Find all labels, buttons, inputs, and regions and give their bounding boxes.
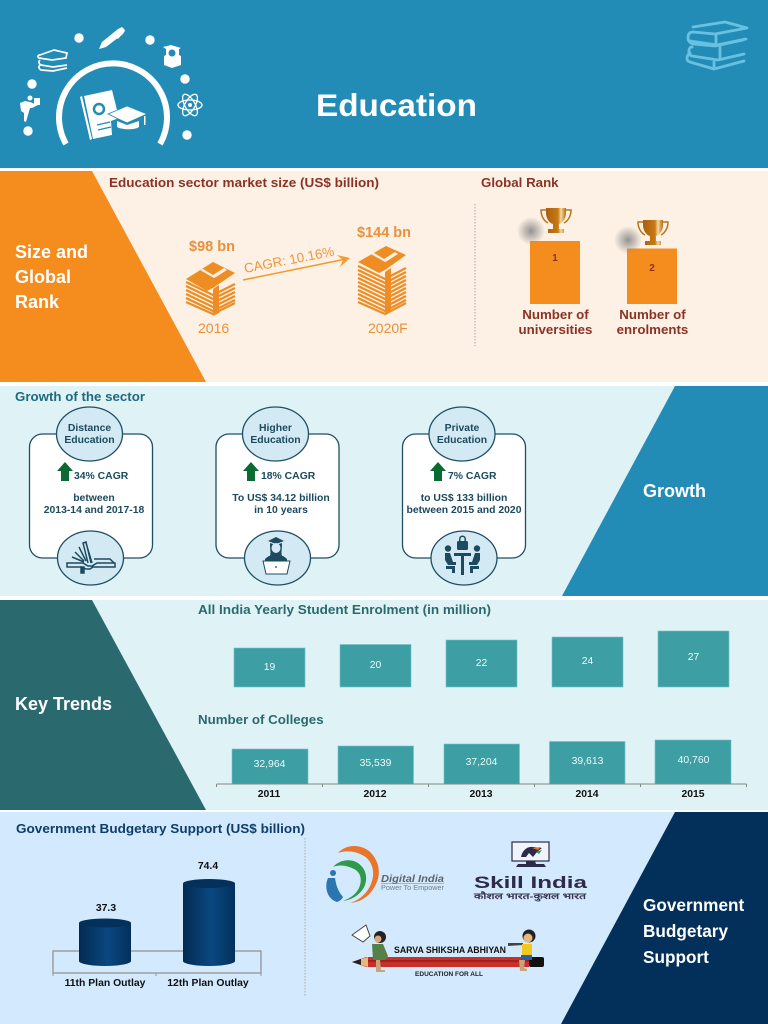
section label: key trends: Key Trends [15,694,112,714]
logo: sarva shiksha abhiyan [352,925,544,978]
CAGR label: CAGR: 10.16% [243,244,336,276]
card: private education: 7% CAGR [448,471,497,482]
chart: cylinders: 12th Plan Outlay [167,978,249,989]
card: distance education: 34% CAGR [74,471,129,482]
podium: number of universities: Number of [522,307,589,322]
icon: trophy [638,220,668,245]
bar chart: number of colleges: 37,204 [466,757,498,768]
card: higher education [216,407,339,585]
section label: government budgetary support: Support [643,947,709,967]
header icon: education emblem [20,27,202,144]
logo: skill india: कौशल भारत-कुशल भारत [473,891,588,902]
bar chart: number of colleges: 39,613 [572,756,604,767]
card: distance education: 2013-14 and 2017-18 [44,505,144,516]
bar chart: number of colleges: 2011 [258,789,280,800]
card: private education: between 2015 and 2020 [407,505,522,516]
heading: global rank: Global Rank [481,175,559,190]
chart: cylinders: 37.3 [96,903,116,914]
card: higher education: Higher [259,423,292,434]
section label: size and global rank: Global [15,267,71,287]
chart: market size growth [186,225,411,336]
panel: size and global rank [0,171,768,382]
podium: number of enrolments: enrolments [617,322,688,337]
card: private education: Education [437,435,487,446]
logo: skill india: Skill India [474,874,588,892]
logo: digital india: Digital India [381,873,444,885]
card: private education [402,407,526,585]
heading: growth of the sector: Growth of the sector [15,389,145,404]
bar chart: number of colleges: 2014 [575,789,599,800]
section label: government budgetary support [643,895,745,967]
logo: sarva shiksha abhiyan: EDUCATION FOR ALL [415,971,483,978]
boy pointing [508,930,536,971]
card: higher education: Education [250,435,301,446]
icon: up arrow [243,462,259,481]
icon: stacked books [687,22,747,69]
panel: government budgetary support [0,812,768,1024]
heading: market size: Education sector market size (US$ billion) [109,175,379,190]
bar chart: number of colleges: 2015 [681,789,705,800]
header band [0,0,768,168]
bar chart: student enrolment: 20 [370,660,381,671]
podium: number of universities: 1 [552,253,558,264]
heading: student enrolment: All India Yearly Student Enrolment (in million) [198,602,491,617]
card: higher education: 18% CAGR [261,471,316,482]
icon: up arrow [430,462,446,481]
logo: skill india [473,842,588,902]
year 2016: 2016 [198,320,229,336]
card: distance education: Distance [68,423,111,434]
bar chart: student enrolment [234,631,729,687]
section label: growth: Growth [643,481,706,501]
panel: key trends [0,600,768,810]
heading: budgetary support: Government Budgetary Support (US$ billion) [16,821,305,836]
podium: number of enrolments: 2 [649,263,655,274]
icon: open book [67,542,115,573]
section label: government budgetary support: Government [643,895,745,915]
bar chart: student enrolment: 22 [476,658,487,669]
card: distance education: between [73,493,115,504]
section label: size and global rank: Rank [15,292,60,312]
card: higher education: To US$ 34.12 billion [232,493,330,504]
card: higher education: in 10 years [254,505,308,516]
podium: number of enrolments: Number of [619,307,686,322]
icon: people with lock [445,536,480,575]
bar chart: number of colleges: 40,760 [678,755,710,766]
bar chart: number of colleges: 35,539 [360,758,392,769]
card: private education: Private [445,423,480,434]
section label: government budgetary support: Budgetary [643,921,728,941]
logo: digital india: Power To Empower [381,883,444,892]
logo: sarva shiksha abhiyan: SARVA SHIKSHA ABHIYAN [394,945,506,956]
logo: digital india [326,846,444,903]
podium: number of enrolments [614,220,688,337]
section label: size and global rank: Size and [15,242,88,262]
card: private education: to US$ 133 billion [421,493,507,504]
icon: money stack 2016 [186,262,235,316]
chart: cylinders: 74.4 [198,861,218,872]
title: Education [316,87,477,123]
chart: cylinders: 11th Plan Outlay [65,978,146,989]
girl with book [352,925,388,972]
bar chart: student enrolment: 19 [264,662,275,673]
chart: cylinders [53,861,261,989]
bar chart: student enrolment: 27 [688,652,699,663]
bar chart: number of colleges: 32,964 [254,759,286,770]
bar chart: number of colleges: 2012 [363,789,387,800]
bar chart: number of colleges [216,740,746,800]
podium: number of universities [517,208,592,337]
card: distance education: Education [64,435,115,446]
section label: size and global rank [15,242,88,312]
bar chart: student enrolment: 24 [582,656,593,667]
arrow: CAGR [243,255,350,280]
value 2020: $144 bn [357,225,411,241]
podium: number of universities: universities [519,322,592,337]
value 2016: $98 bn [189,239,235,255]
card: distance education [30,407,152,585]
icon: up arrow [57,462,73,481]
panel: growth [0,386,768,596]
icon: money stack 2020 [358,246,406,314]
bar chart: number of colleges: 2013 [469,789,493,800]
icon: trophy [541,208,571,233]
heading: number of colleges: Number of Colleges [198,712,324,727]
icon: graduate with laptop [263,537,290,574]
year 2020F: 2020F [368,320,408,336]
